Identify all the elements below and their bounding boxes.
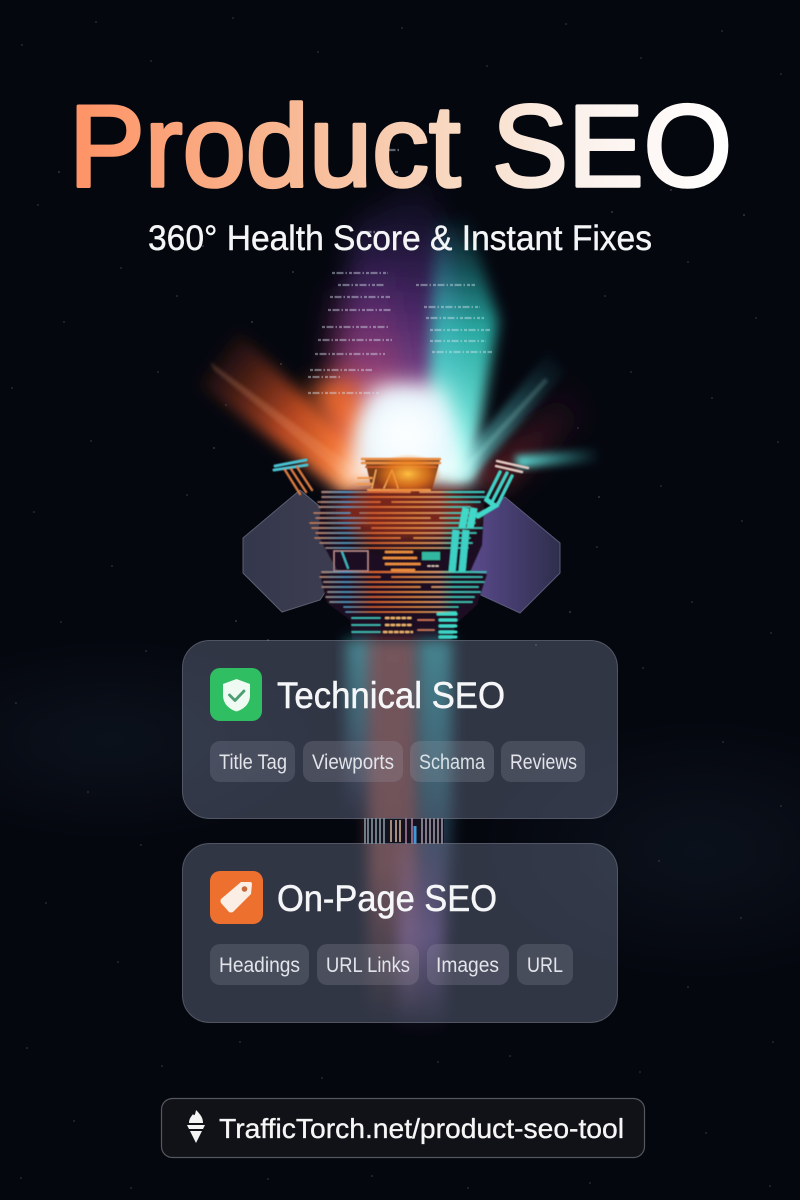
side plates bbox=[243, 490, 560, 613]
tower: right arm bbox=[478, 461, 528, 516]
beam behind the panels bbox=[346, 640, 452, 1030]
chip: Images bbox=[427, 944, 509, 985]
chip: Reviews: Reviews bbox=[510, 750, 577, 774]
chip: Headings bbox=[210, 944, 309, 985]
title: Product SEO bbox=[69, 81, 732, 211]
chip: Reviews bbox=[501, 741, 585, 782]
tower: left arm bbox=[274, 460, 312, 494]
chip: Title Tag bbox=[210, 741, 295, 782]
tower: neck bbox=[352, 614, 456, 637]
heading: Technical SEO: Technical SEO bbox=[277, 675, 505, 716]
connector strip between the panels bbox=[363, 818, 444, 844]
footer link text: TrafficTorch.net/product-seo-tool bbox=[219, 1113, 624, 1144]
tower bbox=[274, 454, 528, 640]
subtitle: 360° Health Score & Instant Fixes bbox=[148, 219, 652, 258]
footer: URL bar bbox=[162, 1098, 644, 1158]
chip: Viewports: Viewports bbox=[312, 750, 394, 774]
chip: URL Links bbox=[317, 944, 419, 985]
chip: URL: URL bbox=[527, 953, 563, 977]
heading: On-Page SEO: On-Page SEO bbox=[277, 878, 497, 919]
background clouds bbox=[0, 640, 800, 980]
chip: Schama bbox=[410, 741, 494, 782]
icon: green shield bbox=[210, 668, 262, 721]
tower: top cap bbox=[357, 459, 440, 490]
chip: Schama: Schama bbox=[419, 750, 485, 774]
tower: stacked rings bbox=[310, 492, 486, 548]
panel: On-Page SEO bbox=[182, 844, 618, 1022]
chip: URL Links: URL Links bbox=[326, 953, 410, 977]
tower: circuit details bbox=[334, 508, 474, 572]
panel: Technical SEO bbox=[182, 640, 618, 818]
chip: Viewports bbox=[303, 741, 403, 782]
chip: Title Tag: Title Tag bbox=[219, 750, 287, 774]
light rays rising from the tower bbox=[200, 170, 600, 494]
icon: torch bbox=[187, 1110, 205, 1143]
icon: orange price tag bbox=[210, 871, 263, 924]
tower: body silhouette bbox=[318, 490, 487, 640]
chip: URL bbox=[517, 944, 573, 985]
code text columns in the light bbox=[308, 130, 492, 393]
chip: Headings: Headings bbox=[219, 953, 300, 977]
chip: Images: Images bbox=[436, 953, 499, 977]
tower: lower collar bbox=[320, 572, 486, 612]
